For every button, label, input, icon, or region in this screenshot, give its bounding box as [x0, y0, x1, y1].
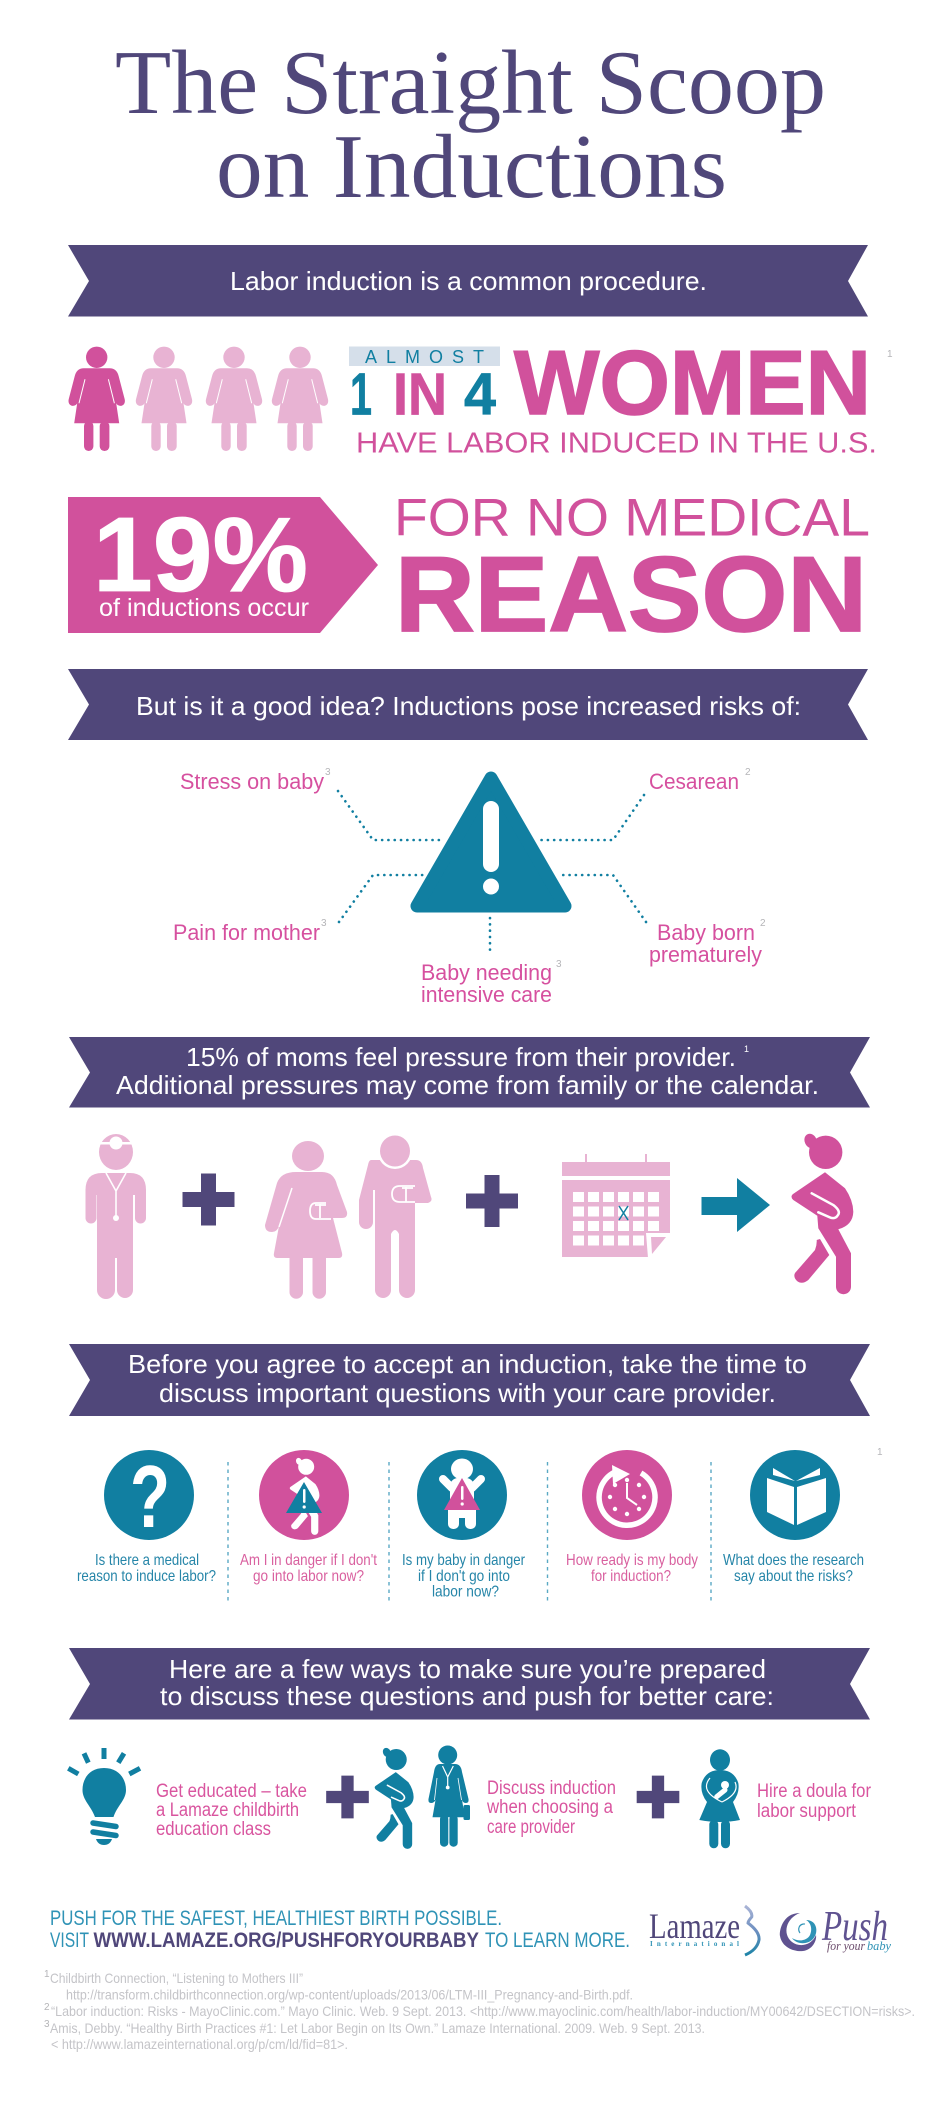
footnotes: 3 — [44, 2019, 50, 2030]
footnotes: Childbirth Connection, “Listening to Mothers III” — [50, 1970, 303, 1986]
ribbon: pressure: 1 — [744, 1044, 749, 1054]
question 1 — [77, 1447, 216, 1585]
risk: baby needing intensive care: Baby needing — [421, 960, 552, 985]
risk: cesarean: 2 — [745, 767, 751, 778]
tip 1 text: education class — [156, 1819, 271, 1840]
footnotes: Amis, Debby. “Healthy Birth Practices #1: Let Labor Begin on Its Own.” Lamaze International. 2009. Web. 9 Sept. 2013. — [50, 2020, 705, 2036]
logo: Push for your baby: for your — [827, 1938, 866, 1953]
call to action: PUSH FOR THE SAFEST, HEALTHIEST BIRTH POSSIBLE. — [50, 1907, 502, 1930]
ribbon: common procedure — [68, 245, 868, 316]
question 3: Is my baby in danger — [402, 1552, 526, 1569]
tip 3 text: Hire a doula for — [757, 1781, 872, 1802]
footnote mark: 1 — [877, 1447, 883, 1458]
risk: baby born prematurely: prematurely — [649, 942, 762, 967]
logo: Lamaze International: Lamaze — [649, 1906, 740, 1946]
have labor induced: HAVE LABOR INDUCED IN THE U.S. — [356, 428, 877, 460]
plus sign — [466, 1175, 518, 1227]
title: The Straight Scoop — [115, 32, 826, 133]
arrow — [702, 1178, 770, 1232]
tips row — [68, 1746, 872, 1849]
question 4: How ready is my body — [566, 1552, 698, 1569]
ribbon: ways to prepare: to discuss these questions and push for better care: — [160, 1681, 774, 1711]
risk diagram — [173, 767, 766, 1007]
tip 1 text: Get educated – take — [156, 1781, 307, 1802]
icon: female family member — [265, 1141, 347, 1299]
almost label: ALMOST — [365, 347, 484, 367]
risk: pain for mother: Pain for mother — [173, 920, 320, 945]
icon: pregnant woman — [375, 1747, 414, 1849]
footnotes: 1 — [44, 1969, 50, 1980]
question 3 — [402, 1450, 526, 1600]
pressure equation — [86, 1132, 853, 1299]
icon: doctor — [86, 1134, 146, 1299]
call to action — [50, 1907, 630, 1952]
question 1: reason to induce labor? — [77, 1568, 216, 1585]
icon: warning triangle — [417, 778, 565, 906]
question 4 — [566, 1450, 698, 1585]
tip 3 text: labor support — [757, 1801, 857, 1822]
logo: Lamaze International: International — [650, 1940, 739, 1948]
question 2 — [240, 1450, 377, 1585]
logo: Push for your baby: baby — [867, 1938, 891, 1953]
tip 1 text: a Lamaze childbirth — [156, 1800, 299, 1821]
footnote mark: 1 — [887, 349, 893, 360]
ribbon: risks: But is it a good idea? Inductions pose increased risks of: — [136, 691, 801, 721]
call to action: VISIT — [50, 1929, 89, 1952]
risk: pain for mother: 3 — [321, 918, 327, 929]
logo: Push for your baby — [780, 1904, 891, 1953]
question 5: say about the risks? — [734, 1568, 853, 1585]
tip 2 text — [486, 1778, 616, 1838]
ribbon: before you agree — [69, 1344, 870, 1416]
plus sign — [326, 1776, 369, 1818]
icon: calendar — [562, 1154, 672, 1258]
footnotes: 2 — [44, 2002, 50, 2013]
heading: for no medical reason — [394, 488, 870, 654]
heading: for no medical reason: FOR NO MEDICAL — [394, 488, 870, 548]
question 5 — [723, 1450, 864, 1585]
title: on Inductions — [216, 116, 727, 217]
call to action: TO LEARN MORE. — [485, 1929, 630, 1952]
ribbon: before you agree: discuss important questions with your care provider. — [159, 1378, 776, 1408]
ribbon: common procedure: Labor induction is a common procedure. — [230, 266, 707, 296]
ribbon: ways to prepare: Here are a few ways to make sure you’re prepared — [169, 1654, 766, 1684]
plus sign — [182, 1174, 234, 1226]
risk: baby needing intensive care: intensive care — [421, 982, 552, 1007]
icon row: four women, one highlighted — [68, 347, 328, 451]
women word: WOMEN — [514, 333, 871, 434]
connector lines — [338, 791, 646, 955]
icon: female doctor — [428, 1746, 470, 1847]
risk: baby born prematurely: Baby born — [657, 920, 755, 945]
footnotes: http://transform.childbirthconnection.org/wp-content/uploads/2013/06/LTM-III_Pregnancy-and-Birth.pdf. — [66, 1986, 633, 2002]
ribbon: pressure: Additional pressures may come from family or the calendar. — [116, 1070, 819, 1100]
logo: Push for your baby: Push — [821, 1904, 888, 1950]
ribbon: pressure — [69, 1037, 870, 1108]
footnotes: < http://www.lamazeinternational.org/p/cm/ld/fid=81>. — [51, 2036, 348, 2052]
1 in 4 — [350, 362, 496, 428]
risk: baby needing intensive care — [421, 959, 562, 1007]
question 3: labor now? — [432, 1584, 499, 1600]
risk: baby needing intensive care: 3 — [556, 959, 562, 970]
tip 3 text — [757, 1781, 872, 1822]
icon: doula with baby — [699, 1749, 740, 1848]
risk: baby born prematurely — [649, 918, 766, 967]
question 3: if I don't go into — [418, 1568, 510, 1585]
1 in 4: 4 — [464, 362, 496, 428]
tip 2 text: care provider — [487, 1817, 576, 1838]
callout: 19 percent arrow: 19% — [93, 496, 308, 614]
statistic: almost 1 in 4 women — [349, 333, 893, 460]
question 2: Am I in danger if I don't — [240, 1552, 377, 1569]
title — [115, 32, 826, 217]
callout: 19 percent arrow — [68, 496, 378, 633]
question 1: Is there a medical — [95, 1552, 199, 1569]
question 5: What does the research — [723, 1552, 864, 1569]
callout: 19 percent arrow: of inductions occur — [99, 594, 309, 622]
1 in 4: 1 — [350, 362, 372, 428]
plus sign — [637, 1776, 679, 1818]
ribbon: ways to prepare — [69, 1648, 870, 1720]
questions panel — [77, 1447, 883, 1601]
tip 2 text: when choosing a — [486, 1797, 613, 1818]
question 1: ? — [130, 1447, 170, 1546]
question 2: go into labor now? — [253, 1568, 364, 1585]
icon: light bulb — [68, 1748, 140, 1845]
icon: pregnant woman — [791, 1132, 853, 1294]
ribbon: before you agree: Before you agree to accept an induction, take the time to — [128, 1349, 807, 1379]
call to action: WWW.LAMAZE.ORG/PUSHFORYOURBABY — [94, 1929, 479, 1952]
ribbon: pressure: 15% of moms feel pressure from their provider. — [186, 1042, 736, 1072]
icon: male family member — [359, 1133, 432, 1298]
risk: stress on baby: Stress on baby — [180, 769, 324, 794]
heading: for no medical reason: REASON — [395, 534, 867, 654]
1 in 4: IN — [393, 362, 447, 428]
tip 2 text: Discuss induction — [487, 1778, 616, 1799]
risk: baby born prematurely: 2 — [760, 918, 766, 929]
ribbon: risks — [68, 669, 868, 740]
question 4: for induction? — [591, 1568, 671, 1585]
tip 1 text — [156, 1781, 307, 1840]
risk: stress on baby: 3 — [325, 767, 331, 778]
risk: cesarean: Cesarean — [649, 769, 739, 794]
column dividers — [228, 1462, 711, 1601]
footnotes — [44, 1969, 915, 2052]
